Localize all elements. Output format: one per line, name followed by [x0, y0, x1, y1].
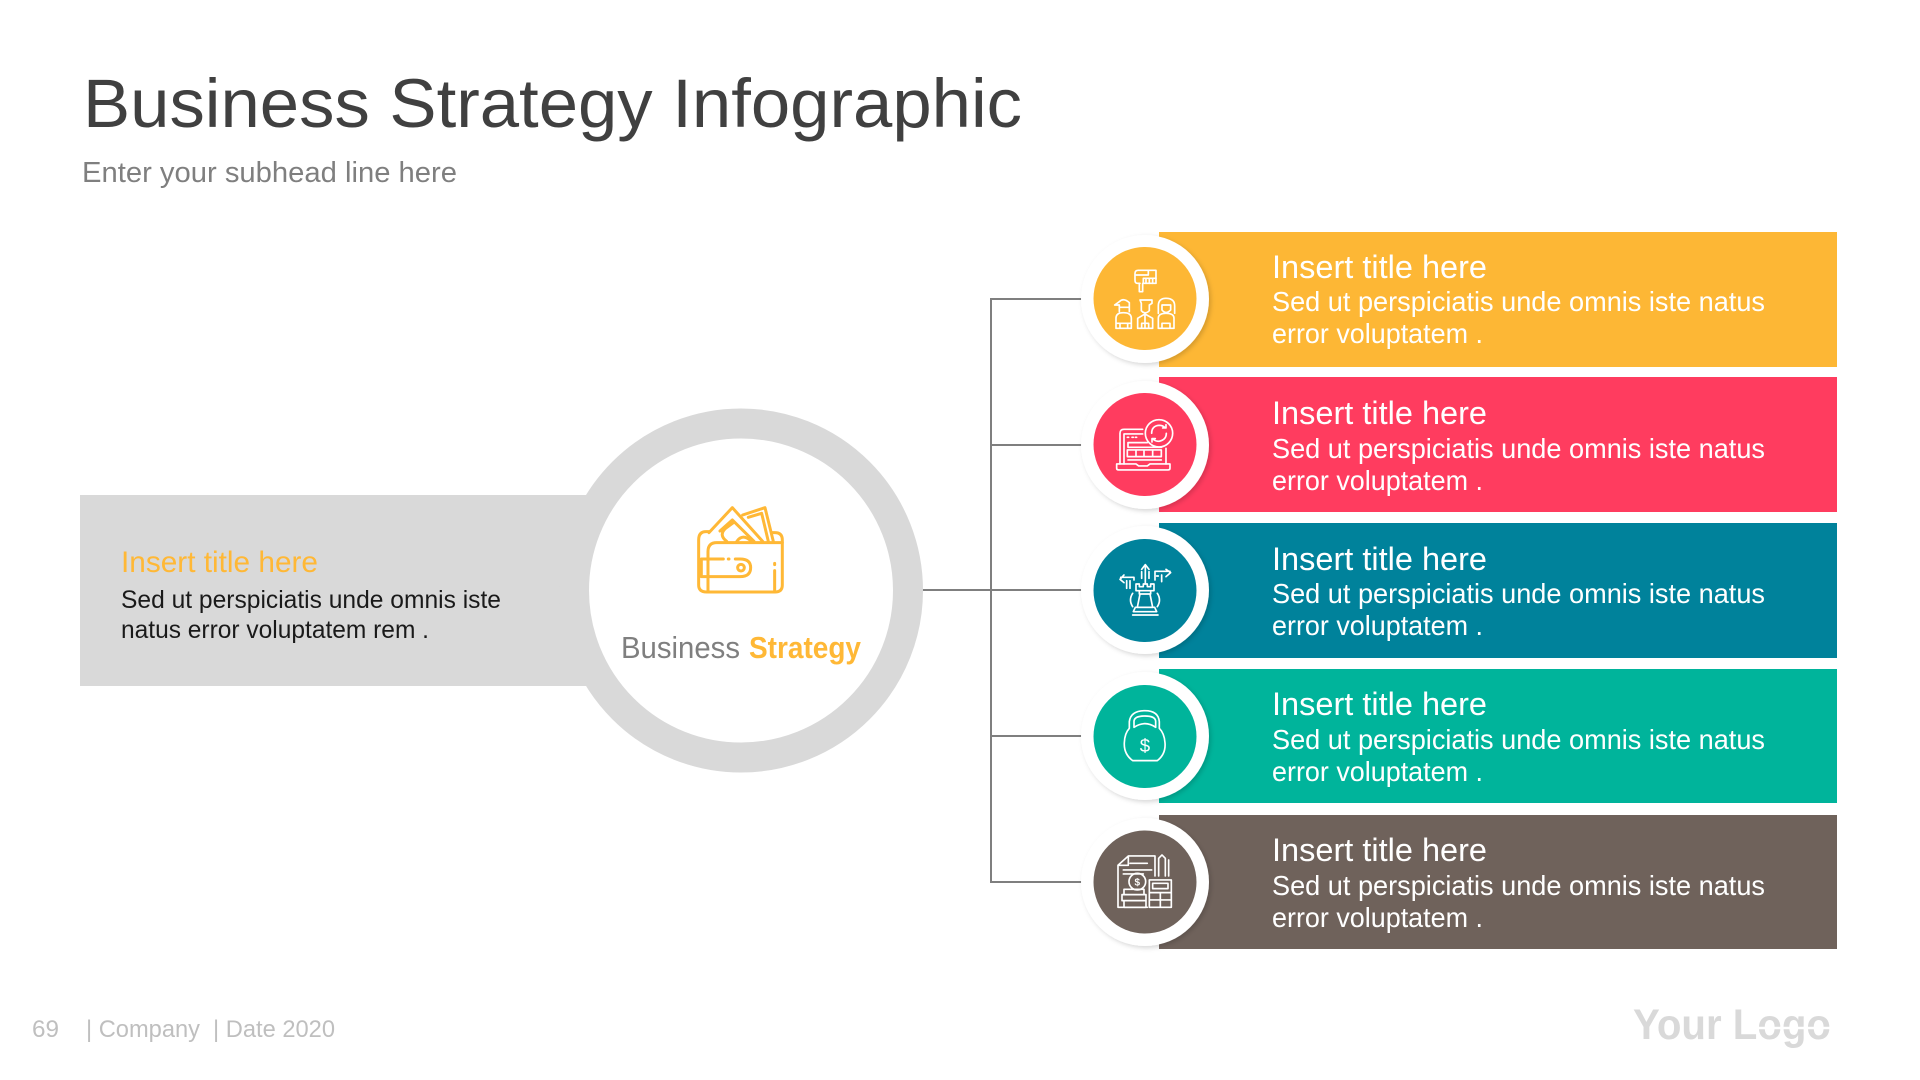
- item 3 badge fill: [1094, 539, 1196, 642]
- item 2 title: Insert title here: [1272, 395, 1487, 431]
- item 5 badge: [1081, 818, 1209, 946]
- left panel body text: natus error voluptatem rem .: [121, 616, 429, 644]
- item 4 text: Sed ut perspiciatis unde omnis iste natus: [1272, 724, 1765, 755]
- item 3 text: error voluptatem .: [1272, 610, 1483, 641]
- item 1 text: error voluptatem .: [1272, 318, 1483, 349]
- item 1 badge: [1081, 235, 1209, 363]
- icon: wallet: [699, 508, 782, 592]
- left panel body text: Sed ut perspiciatis unde omnis iste: [121, 586, 501, 614]
- item 2 text: error voluptatem .: [1272, 465, 1483, 496]
- connector lines: [922, 299, 1082, 882]
- left panel: description: [80, 495, 620, 686]
- panel: item 4: [1081, 669, 1837, 803]
- item 3 text: Sed ut perspiciatis unde omnis iste natus: [1272, 578, 1765, 609]
- central circle: [574, 424, 908, 758]
- panel: item 3: [1081, 523, 1837, 658]
- item 5 title: Insert title here: [1272, 832, 1487, 868]
- central label: Business: [621, 630, 740, 665]
- item 1 title: Insert title here: [1272, 249, 1487, 285]
- icon: document, coins and calculator: $: [1135, 877, 1141, 888]
- footer: page number: 69: [32, 1016, 59, 1043]
- icon: laptop with refresh: [1117, 420, 1173, 470]
- icon: chess rook with arrows: [1120, 565, 1171, 615]
- footer: company and date: | Company: [86, 1016, 200, 1043]
- item 2 text: Sed ut perspiciatis unde omnis iste natus: [1272, 433, 1765, 464]
- item 1 text: Sed ut perspiciatis unde omnis iste natus: [1272, 286, 1765, 317]
- icon: kettlebell with dollar: [1124, 711, 1165, 761]
- item 3 title: Insert title here: [1272, 541, 1487, 577]
- subtitle: Enter your subhead line here: [82, 157, 457, 189]
- item 2 badge fill: [1094, 393, 1196, 496]
- title: Business Strategy Infographic: [83, 65, 1022, 142]
- left panel heading: Insert title here: [121, 546, 318, 579]
- item 4 title: Insert title here: [1272, 686, 1487, 722]
- item 2 badge: [1081, 381, 1209, 509]
- item 1 badge fill: [1094, 247, 1196, 350]
- item 4 text: error voluptatem .: [1272, 756, 1483, 787]
- icon: kettlebell with dollar: $: [1140, 735, 1151, 756]
- panel: item 1: [1081, 232, 1837, 367]
- logo: Your Logo: [1633, 1001, 1831, 1049]
- item 4 badge fill: [1094, 685, 1196, 788]
- panel: item 5: [1081, 815, 1837, 949]
- item 3 badge: [1081, 526, 1209, 654]
- item 5 badge fill: [1094, 830, 1196, 934]
- icon: document, coins and calculator: [1118, 855, 1171, 907]
- footer: company and date: | Date 2020: [213, 1016, 335, 1043]
- panel: item 2: [1081, 377, 1837, 512]
- item 5 text: error voluptatem .: [1272, 902, 1483, 933]
- item 4 badge: [1081, 672, 1209, 800]
- item 5 text: Sed ut perspiciatis unde omnis iste natus: [1272, 870, 1765, 901]
- icon: team with paint roller: [1115, 270, 1175, 328]
- central label: Strategy: [749, 630, 862, 665]
